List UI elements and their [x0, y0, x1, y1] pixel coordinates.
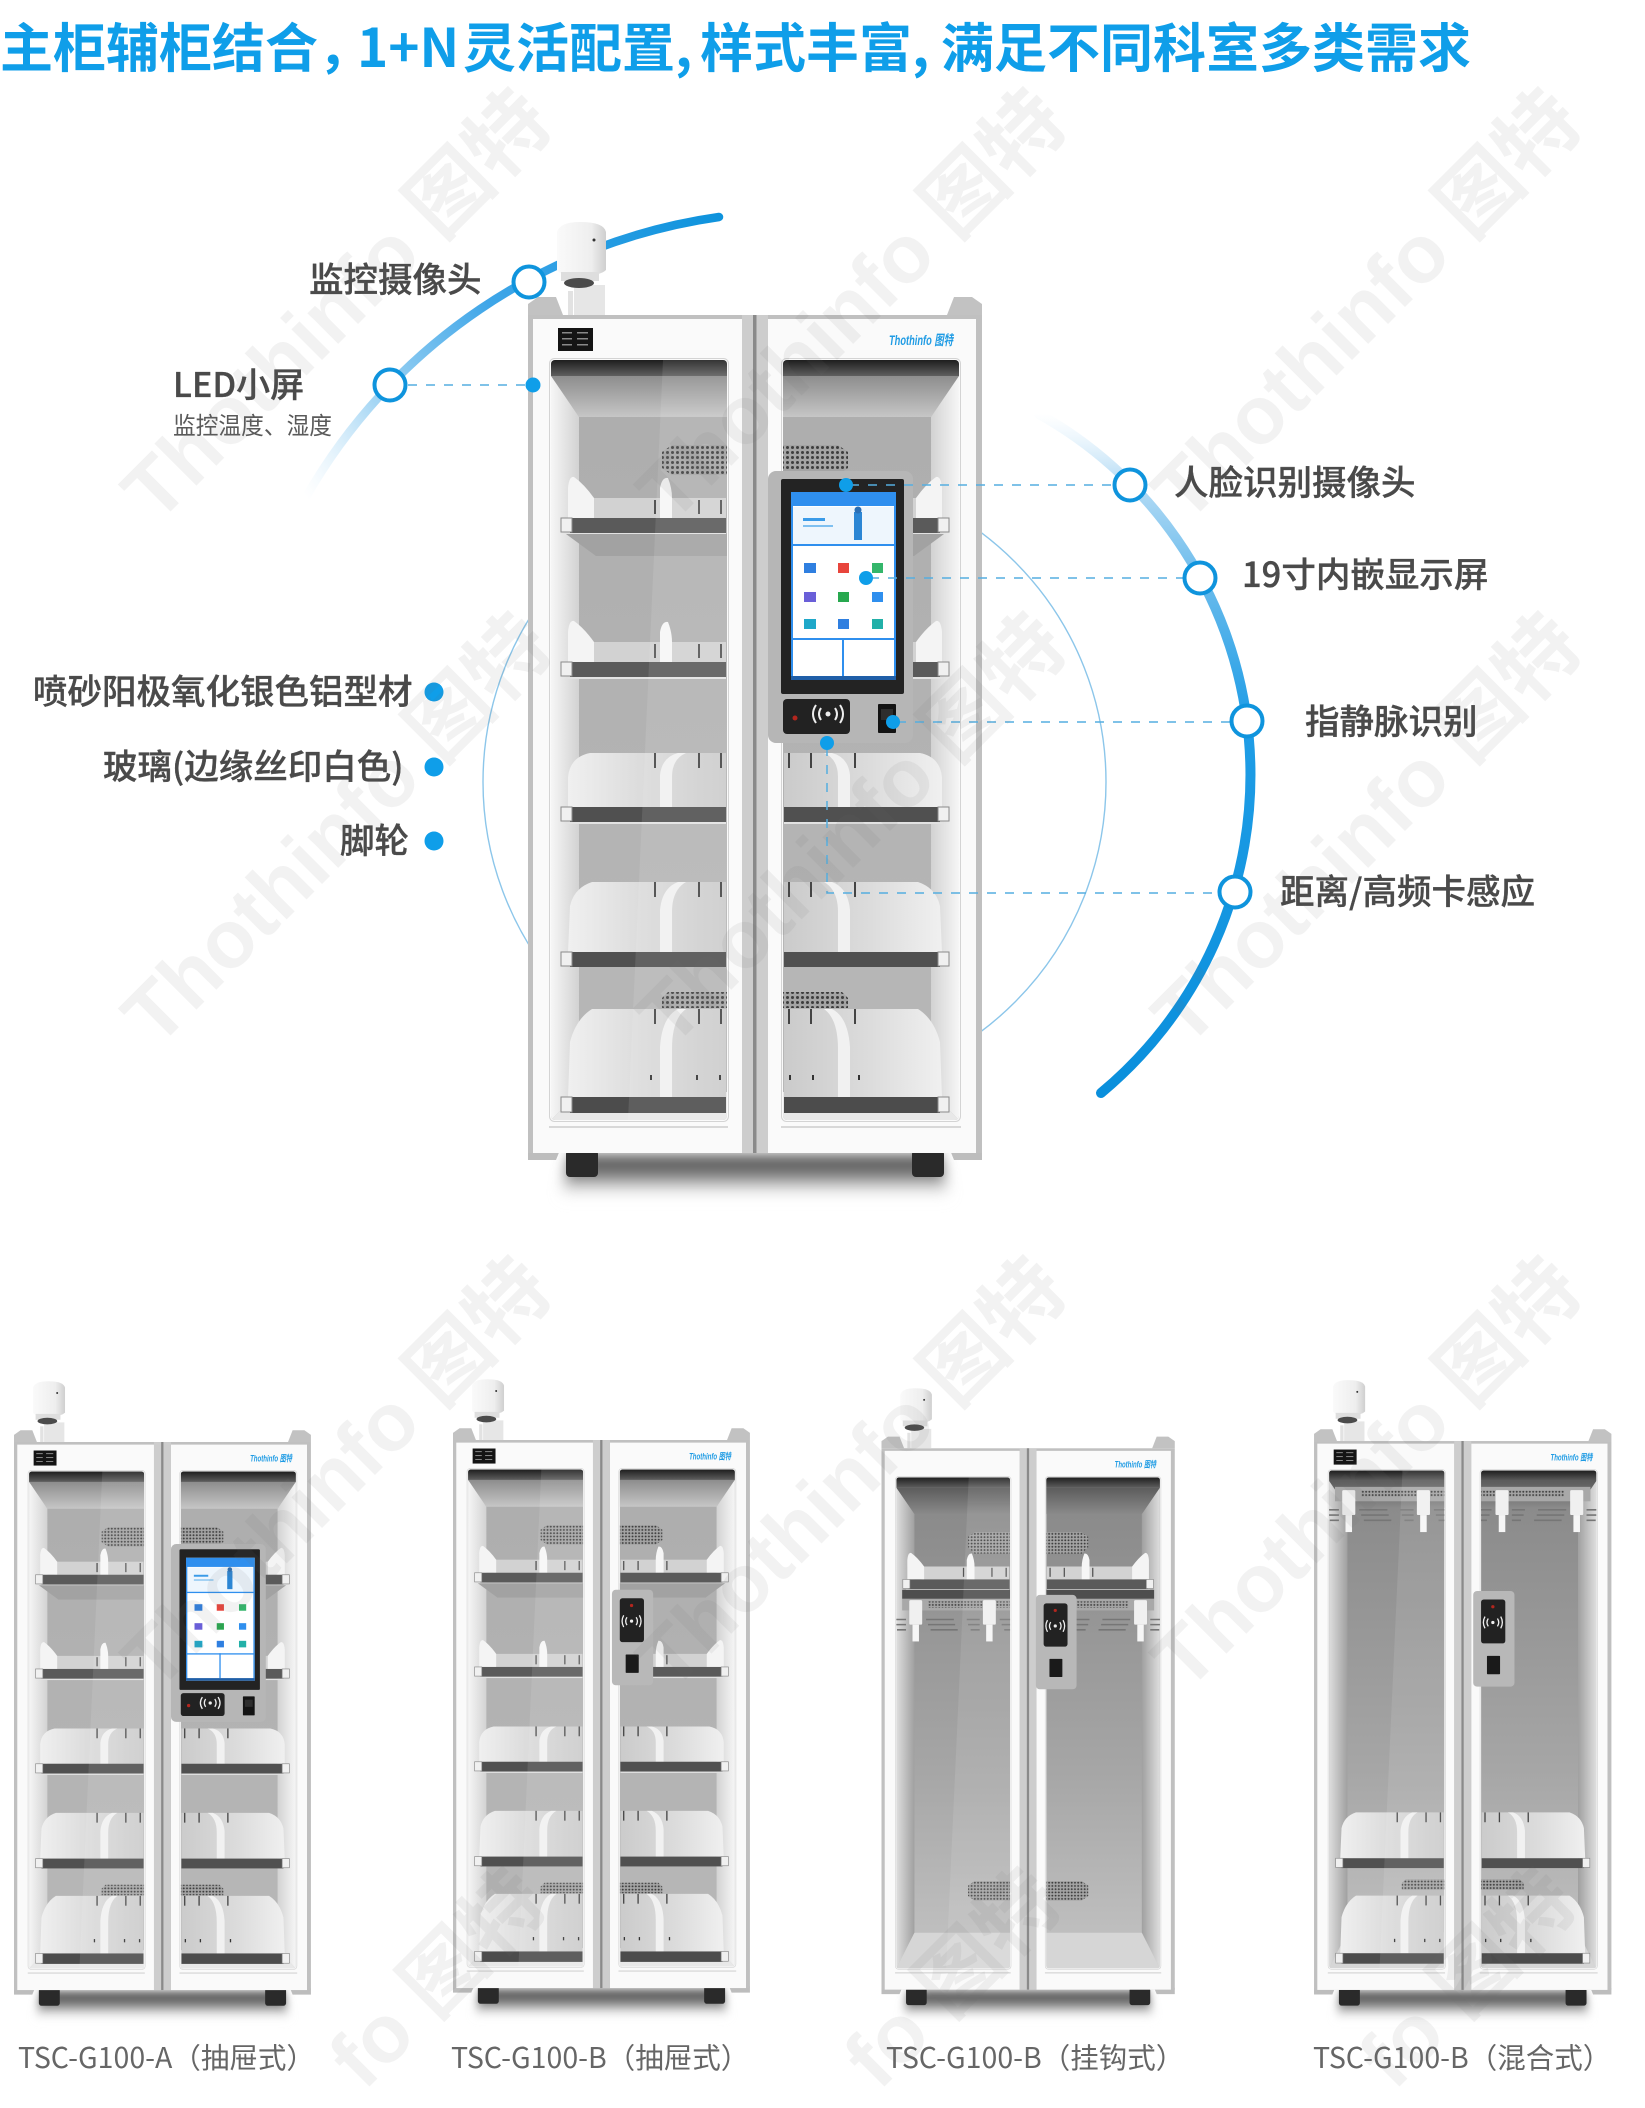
watermark: Thothinfo 图特: [620, 598, 1084, 1062]
right blue arc: [1039, 414, 1250, 1093]
right arc rings: [1114, 470, 1262, 908]
label: face camera: 人脸识别摄像头: [1174, 455, 1416, 505]
label: LED screen: LED小屏: [173, 358, 304, 407]
callout dots on cabinet: [526, 378, 900, 750]
cabinet: TSC-G100-B hook: Thothinfo 图特: [1115, 1460, 1157, 1470]
watermark: fo 图特: [1342, 1854, 1594, 2105]
title: 样式丰富,: [700, 7, 929, 83]
caption: TSC-G100-B hook: TSC-G100-B（挂钩式）: [886, 2036, 1184, 2077]
cabinet: TSC-G100-A drawer: Thothinfo 图特: [250, 1454, 293, 1464]
label: monitoring camera: 监控摄像头: [309, 252, 482, 302]
label: finger vein: 指静脉识别: [1305, 694, 1478, 744]
label: casters: 脚轮: [340, 813, 409, 863]
label: temperature and humidity: 监控温度、湿度: [173, 406, 332, 441]
caption: TSC-G100-B mixed: TSC-G100-B（混合式）: [1313, 2036, 1611, 2077]
main cabinet: Thothinfo 图特: [889, 332, 954, 348]
cabinet: TSC-G100-B drawer: Thothinfo 图特: [689, 1452, 732, 1462]
cabinet: TSC-G100-A drawer: [14, 1381, 311, 2021]
caption: TSC-G100-A drawer: TSC-G100-A（抽屉式）: [18, 2036, 315, 2077]
watermark: Thothinfo 图特: [105, 1242, 569, 1706]
thin guide circle: [483, 470, 1106, 1094]
title: 灵活配置,: [463, 7, 692, 83]
title: 主柜辅柜结合，: [0, 7, 371, 83]
watermark: Thothinfo 图特: [1135, 598, 1599, 1062]
caption: TSC-G100-B drawer: TSC-G100-B（抽屉式）: [451, 2036, 749, 2077]
watermark: Thothinfo 图特: [1135, 1242, 1599, 1706]
watermark: Thothinfo 图特: [1135, 74, 1599, 538]
callout lines: [408, 385, 1231, 893]
left feature dots: [424, 682, 444, 850]
left arc rings: [374, 266, 544, 400]
watermark: fo 图特: [312, 1854, 564, 2105]
cabinet: TSC-G100-B drawer: [453, 1379, 750, 2019]
watermark: Thothinfo 图特: [105, 598, 569, 1062]
cabinet: TSC-G100-B hook: [881, 1388, 1175, 2020]
title: 1+N: [357, 7, 459, 83]
left blue arc: [306, 217, 719, 497]
cabinet: TSC-G100-B mixed: [1314, 1380, 1611, 2021]
watermark: Thothinfo 图特: [620, 1242, 1084, 1706]
cabinet: TSC-G100-B mixed: Thothinfo 图特: [1550, 1453, 1594, 1463]
main cabinet: [528, 222, 982, 1200]
label: glass: 玻璃(边缘丝印白色): [103, 739, 404, 789]
watermark: fo 图特: [827, 1854, 1079, 2105]
watermark: Thothinfo 图特: [620, 74, 1084, 538]
label: 19 inch display: 19寸内嵌显示屏: [1242, 547, 1488, 597]
title: 满足不同科室多类需求: [941, 7, 1471, 83]
label: card reader: 距离/高频卡感应: [1280, 864, 1535, 914]
label: aluminium: 喷砂阳极氧化银色铝型材: [33, 664, 412, 714]
watermark: Thothinfo 图特: [105, 74, 569, 538]
